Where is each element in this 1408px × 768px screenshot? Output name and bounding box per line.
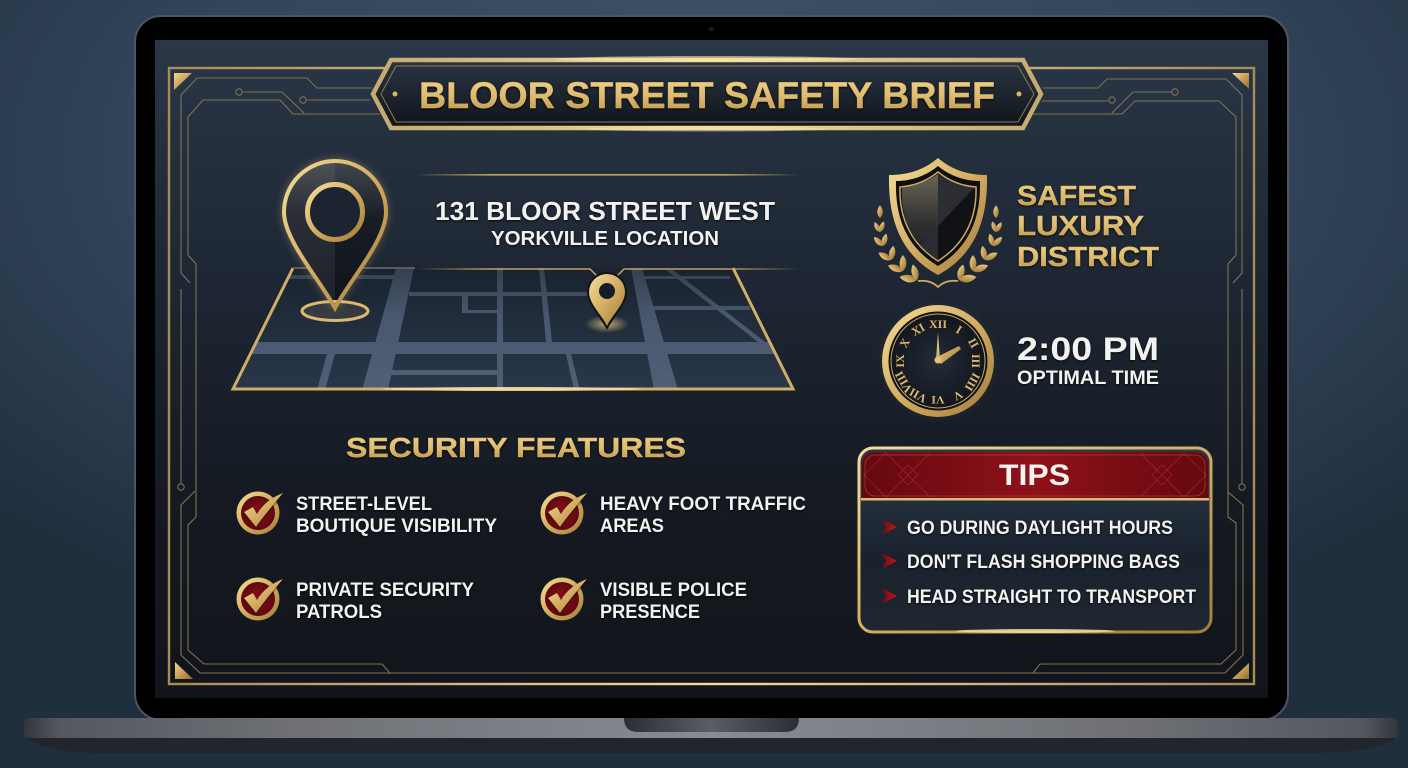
feature: foot traffic bbox=[540, 492, 806, 537]
banner dot right bbox=[1016, 92, 1022, 96]
clock numerals: X bbox=[896, 335, 913, 350]
feature: police presence bbox=[540, 578, 747, 623]
map top shade bbox=[231, 268, 795, 390]
corner triangle bottom right bbox=[1232, 663, 1249, 679]
laurel ribbon bbox=[918, 281, 958, 287]
clock numerals: III bbox=[969, 354, 983, 368]
feature: security patrols bbox=[236, 578, 474, 623]
screen bbox=[155, 40, 1268, 698]
banner top glow bbox=[557, 56, 857, 62]
icon: shield with laurels bbox=[872, 158, 1004, 287]
address lines bbox=[415, 174, 800, 276]
safest luxury district text: SAFEST bbox=[1017, 180, 1136, 211]
bottom rule with notch bbox=[415, 269, 800, 276]
clock numerals bbox=[892, 317, 983, 407]
tips header bbox=[861, 452, 1209, 500]
time text: 2:00 PM bbox=[1017, 331, 1159, 367]
icon: small map pin bbox=[585, 272, 629, 333]
map base bbox=[231, 268, 795, 390]
laptop base lower bbox=[26, 738, 1396, 753]
laurel left bbox=[872, 205, 920, 284]
banner bottom glow bbox=[587, 126, 827, 132]
icon: clock at 2:00 bbox=[877, 300, 999, 422]
map top edge bbox=[293, 267, 415, 269]
safest luxury district text bbox=[1017, 180, 1159, 272]
time text bbox=[1017, 331, 1159, 389]
camera bbox=[708, 26, 714, 32]
title banner bbox=[373, 56, 1041, 132]
clock numerals: VII bbox=[906, 385, 929, 406]
security features list bbox=[236, 492, 806, 623]
top rule bbox=[415, 174, 800, 176]
shield bbox=[889, 158, 987, 275]
map outline bbox=[233, 268, 793, 389]
clock numerals: I bbox=[953, 322, 965, 337]
laptop base upper bbox=[24, 718, 1398, 738]
ornate frame bbox=[169, 68, 1254, 684]
tip: transport: HEAD STRAIGHT TO TRANSPORT bbox=[907, 587, 1196, 608]
clock numerals: II bbox=[965, 335, 982, 351]
feature: security patrols: PRIVATE SECURITY bbox=[296, 579, 474, 601]
heading: security features: SECURITY FEATURES bbox=[346, 432, 686, 463]
clock numerals: IIII bbox=[962, 370, 983, 394]
map bottom glow bbox=[382, 387, 642, 391]
tips body bbox=[859, 448, 1211, 632]
icon: large location pin bbox=[284, 161, 386, 320]
pin base ellipse bbox=[302, 302, 368, 320]
address text bbox=[435, 196, 775, 250]
clock numerals: VIII bbox=[892, 368, 915, 395]
tips heading: TIPS bbox=[999, 459, 1070, 492]
banner plate bbox=[373, 60, 1041, 128]
title: BLOOR STREET SAFETY BRIEF bbox=[419, 75, 995, 116]
laurel right bbox=[956, 205, 1004, 284]
feature: boutique visibility bbox=[236, 492, 497, 537]
clock numerals: VI bbox=[931, 393, 945, 407]
pin inner ring bbox=[308, 184, 362, 240]
map roads bbox=[240, 268, 785, 390]
tip: shopping bags: DON'T FLASH SHOPPING BAGS bbox=[907, 552, 1180, 573]
clock numerals: XI bbox=[909, 320, 928, 339]
tips bottom glow bbox=[955, 629, 1115, 633]
panel: tips bbox=[859, 431, 1211, 633]
address text: 131 BLOOR STREET WEST bbox=[435, 196, 775, 226]
clock hands bbox=[935, 332, 961, 364]
feature: boutique visibility: BOUTIQUE VISIBILITY bbox=[296, 515, 497, 537]
banner dot left bbox=[392, 92, 398, 96]
feature: police presence: VISIBLE POLICE bbox=[600, 579, 747, 601]
corner triangle bottom left bbox=[175, 662, 193, 679]
clock numerals: V bbox=[950, 387, 965, 404]
feature: foot traffic: HEAVY FOOT TRAFFIC bbox=[600, 493, 806, 515]
feature: foot traffic: AREAS bbox=[600, 515, 664, 537]
corner triangle top left bbox=[174, 73, 192, 90]
map panel bbox=[231, 267, 795, 391]
tip: daylight: GO DURING DAYLIGHT HOURS bbox=[907, 518, 1173, 539]
safest luxury district text: DISTRICT bbox=[1017, 241, 1159, 272]
address text: YORKVILLE LOCATION bbox=[491, 228, 719, 250]
corner triangle top right bbox=[1232, 73, 1249, 89]
laptop lid bbox=[135, 16, 1288, 720]
feature: security patrols: PATROLS bbox=[296, 601, 382, 623]
safest luxury district text: LUXURY bbox=[1017, 210, 1144, 241]
feature: boutique visibility: STREET-LEVEL bbox=[296, 493, 432, 515]
feature: police presence: PRESENCE bbox=[600, 601, 700, 623]
laptop notch bbox=[624, 718, 799, 732]
outer frame bbox=[169, 68, 1254, 684]
clock numerals: XII bbox=[929, 317, 947, 331]
clock numerals: IX bbox=[893, 354, 907, 368]
time text: OPTIMAL TIME bbox=[1017, 368, 1159, 389]
